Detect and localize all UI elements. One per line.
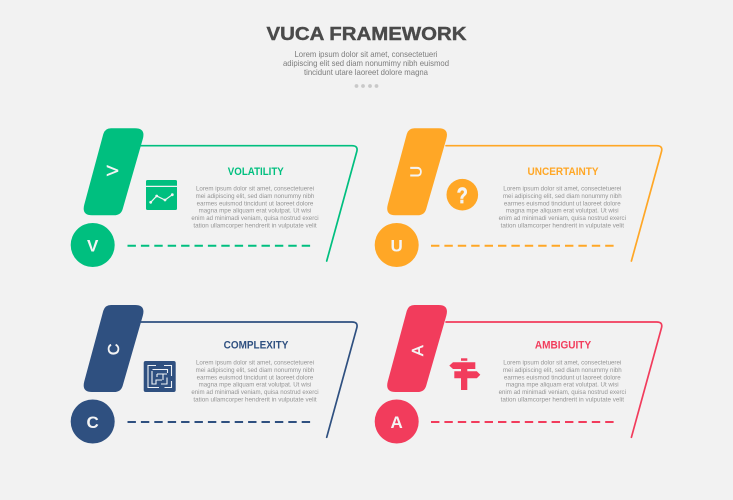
panel: uncertainty <box>375 128 662 267</box>
heading: AMBIGUITY <box>535 340 592 352</box>
body text <box>191 187 319 229</box>
title: VUCA FRAMEWORK <box>266 23 467 44</box>
panel: complexity <box>71 305 357 444</box>
badge letter: A <box>391 413 403 432</box>
heading: VOLATILITY <box>228 166 284 178</box>
letter badge <box>71 223 115 267</box>
tab letter: A <box>410 345 427 356</box>
body text: Lorem ipsum dolor sit amet, consectetuerei <box>196 361 314 367</box>
body text: tation ullamcorper hendrerit in vulputate velit <box>193 223 317 229</box>
dashed line <box>431 245 614 247</box>
letter badge <box>375 400 419 444</box>
dashed line <box>128 421 311 423</box>
outline frame <box>141 146 357 261</box>
body text: Lorem ipsum dolor sit amet, consectetuerei <box>503 187 621 193</box>
body text: earmes euismod tincidunt ut laoreet dolore <box>504 375 621 381</box>
body text: enim ad minimadi veniam, quisa nostrud exerci <box>191 390 319 396</box>
body text: magna mpe aliquam erat volutpat. Ut wisi <box>506 383 619 389</box>
body text: tation ullamcorper hendrerit in vulputate velit <box>501 223 624 229</box>
badge letter: C <box>87 413 99 432</box>
heading: UNCERTAINTY <box>528 166 599 178</box>
icon: question mark: ? <box>457 183 468 208</box>
body text: earmes euismod tincidunt ut laoreet dolore <box>197 375 314 381</box>
body text: Lorem ipsum dolor sit amet, consectetuerei <box>196 187 314 193</box>
body text: earmes euismod tincidunt ut laoreet dolore <box>197 201 314 207</box>
subtitle text block <box>283 50 449 77</box>
letter badge <box>375 223 419 267</box>
panel: volatility <box>71 128 357 267</box>
dashed line <box>431 421 614 423</box>
subtitle text block: adipiscing elit sed diam nonumimy nibh euismod <box>283 59 449 68</box>
letter badge <box>71 400 115 444</box>
tab letter: V <box>105 165 122 176</box>
body text <box>499 361 626 403</box>
tab letter: U <box>408 166 426 177</box>
body text: enim ad minimadi veniam, quisa nostrud exerci <box>499 216 626 222</box>
badge letter: U <box>391 236 403 256</box>
body text: mei adipiscing elit, sed diam nonummy nibh <box>196 368 314 374</box>
body text: mei adipiscing elit, sed diam nonummy nibh <box>196 194 314 200</box>
body text <box>191 361 319 403</box>
subtitle text block: tincidunt utare laoreet dolore magna <box>304 68 428 77</box>
dashed line <box>128 245 311 247</box>
body text: tation ullamcorper hendrerit in vulputate velit <box>501 397 624 403</box>
body text: earmes euismod tincidunt ut laoreet dolore <box>504 201 621 207</box>
icon: question mark <box>446 179 478 210</box>
icon: signpost <box>449 358 480 390</box>
body text: enim ad minimadi veniam, quisa nostrud exerci <box>191 216 319 222</box>
body text: enim ad minimadi veniam, quisa nostrud exerci <box>499 390 626 396</box>
outline frame <box>141 322 357 437</box>
icon: maze <box>144 361 176 392</box>
outline frame <box>446 146 662 261</box>
subtitle text block: Lorem ipsum dolor sit amet, consectetueri <box>294 50 438 59</box>
slanted tab <box>387 305 447 392</box>
body text: Lorem ipsum dolor sit amet, consectetuerei <box>503 361 621 367</box>
heading: COMPLEXITY <box>224 340 289 352</box>
body text: magna mpe aliquam erat volutpat. Ut wisi <box>506 209 619 215</box>
slanted tab <box>84 305 143 392</box>
body text: tation ullamcorper hendrerit in vulputate velit <box>193 397 317 403</box>
body text: mei adipiscing elit, sed diam nonummy nibh <box>503 194 622 200</box>
panel: ambiguity <box>375 305 662 444</box>
body text: mei adipiscing elit, sed diam nonummy nibh <box>503 368 622 374</box>
body text: magna mpe aliquam erat volutpat. Ut wisi <box>199 383 311 389</box>
tab letter: C <box>106 344 123 355</box>
slanted tab <box>84 128 143 215</box>
body text <box>499 187 626 229</box>
badge letter: V <box>87 236 99 256</box>
icon: chart window <box>146 180 177 210</box>
body text: magna mpe aliquam erat volutpat. Ut wisi <box>199 209 311 215</box>
slanted tab <box>387 128 447 215</box>
outline frame <box>446 322 662 437</box>
title divider dots <box>355 84 378 88</box>
